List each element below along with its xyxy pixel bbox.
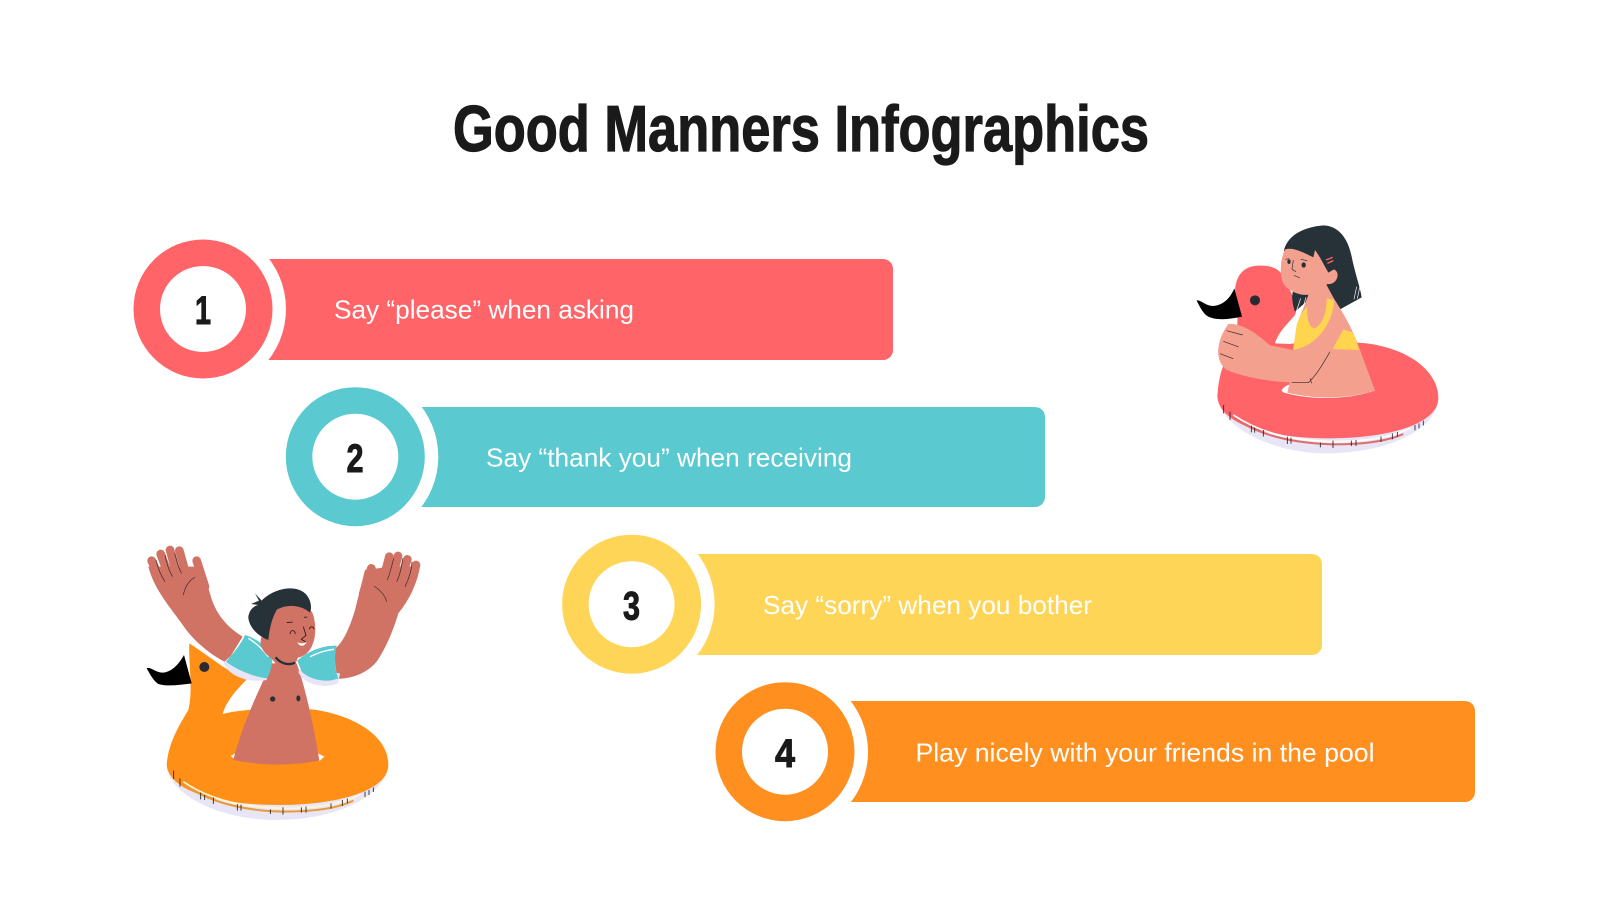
- right arm and hand: [333, 556, 420, 679]
- arm: [1218, 313, 1335, 383]
- left armband: [223, 657, 270, 681]
- title: Good Manners Infographics: [453, 92, 1149, 165]
- step 2: say thank you: [272, 374, 1045, 540]
- neck: [261, 637, 298, 665]
- face: [1281, 249, 1338, 295]
- hair: [1284, 225, 1362, 312]
- step 4: play nicely: 4: [775, 732, 796, 776]
- step 2: say thank you: Say “thank you” when receiving: [486, 442, 852, 472]
- step 1: say please: 1: [195, 289, 211, 333]
- illustration: girl in flamingo float: [1197, 225, 1438, 453]
- illustration: boy in duck float: [147, 550, 420, 820]
- step 4: play nicely: [702, 669, 1475, 835]
- torso: [233, 663, 319, 765]
- step 3: say sorry: Say “sorry” when you bother: [763, 590, 1092, 620]
- step 1: say please: [120, 226, 893, 392]
- boy hair: [248, 588, 311, 640]
- step 2: say thank you: 2: [346, 437, 364, 481]
- head: [267, 605, 315, 658]
- step 3: say sorry: 3: [623, 584, 640, 628]
- beak: [147, 655, 192, 685]
- right armband: [298, 667, 340, 686]
- swimsuit: [1293, 298, 1334, 350]
- step 3: say sorry: [549, 521, 1322, 687]
- beak: [1197, 288, 1242, 319]
- step 4: play nicely: Play nicely with your friends in the pool: [916, 738, 1374, 768]
- left arm and hand: [148, 550, 243, 663]
- step 1: say please: Say “please” when asking: [334, 294, 634, 324]
